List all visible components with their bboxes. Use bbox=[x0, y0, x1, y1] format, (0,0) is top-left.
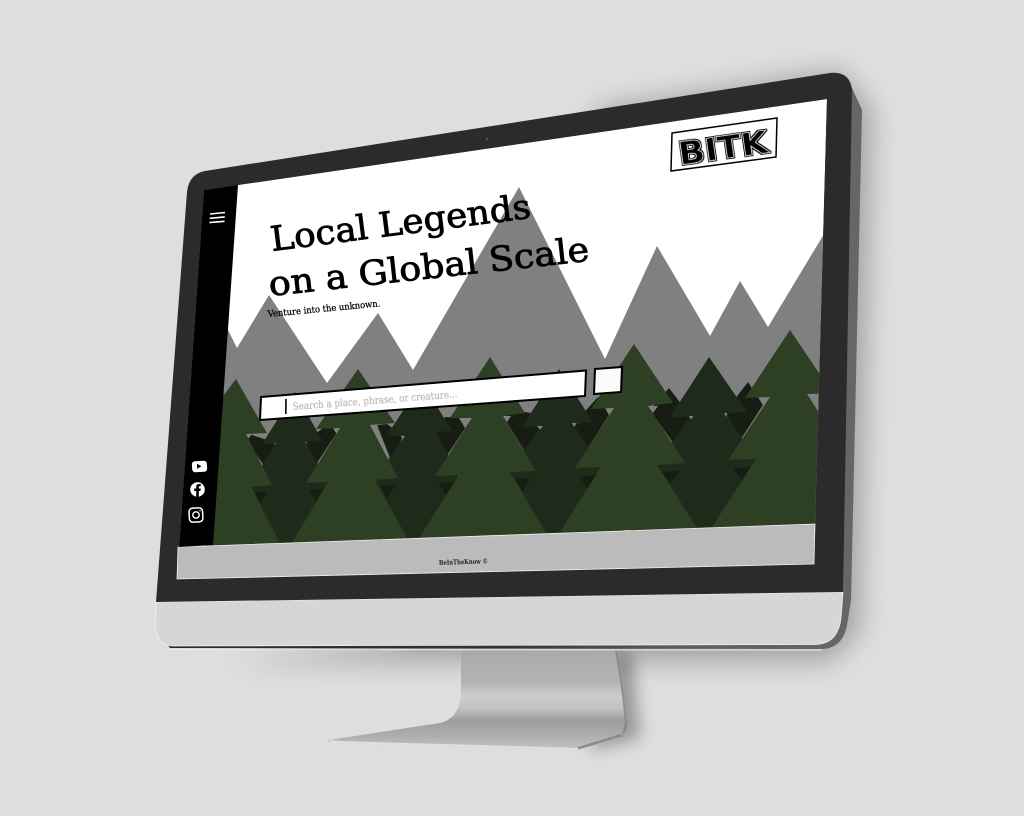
BITK logo bbox=[671, 118, 777, 173]
text cursor bbox=[285, 399, 287, 414]
heading bbox=[267, 187, 591, 305]
dark trees bbox=[235, 357, 790, 545]
monitor chin bbox=[155, 592, 843, 646]
monitor bezel bbox=[156, 73, 852, 602]
sidebar bbox=[179, 185, 238, 547]
footer text: BeInTheKnow © bbox=[439, 557, 488, 567]
search button bbox=[594, 367, 622, 394]
search bar bbox=[260, 370, 586, 420]
camera dot bbox=[486, 138, 488, 140]
footer bar bbox=[177, 524, 815, 579]
back tree gaps bbox=[246, 382, 763, 467]
front trees bbox=[205, 330, 825, 548]
placeholder text: Search a place, phrase, or creature... bbox=[292, 389, 458, 413]
screen bbox=[179, 99, 830, 550]
icon: youtube bbox=[192, 461, 207, 472]
icon: facebook bbox=[190, 482, 205, 497]
lower tree gaps bbox=[255, 467, 751, 503]
icon: instagram bbox=[189, 508, 203, 522]
subtitle: Venture into the unknown. bbox=[266, 299, 381, 320]
icon: hamburger menu bbox=[209, 212, 225, 223]
mountains bbox=[205, 187, 830, 550]
BITK logo: BITK bbox=[676, 125, 771, 173]
tiny notches on dark trees bbox=[537, 413, 728, 430]
heading: Local Legends bbox=[268, 187, 533, 260]
monitor stand bbox=[328, 648, 627, 750]
screen white background bbox=[179, 99, 827, 546]
monitor shadow bbox=[230, 70, 872, 750]
heading: on a Global Scale bbox=[267, 230, 591, 305]
small sky notches bbox=[248, 406, 658, 445]
monitor body side and rim bbox=[156, 88, 862, 650]
